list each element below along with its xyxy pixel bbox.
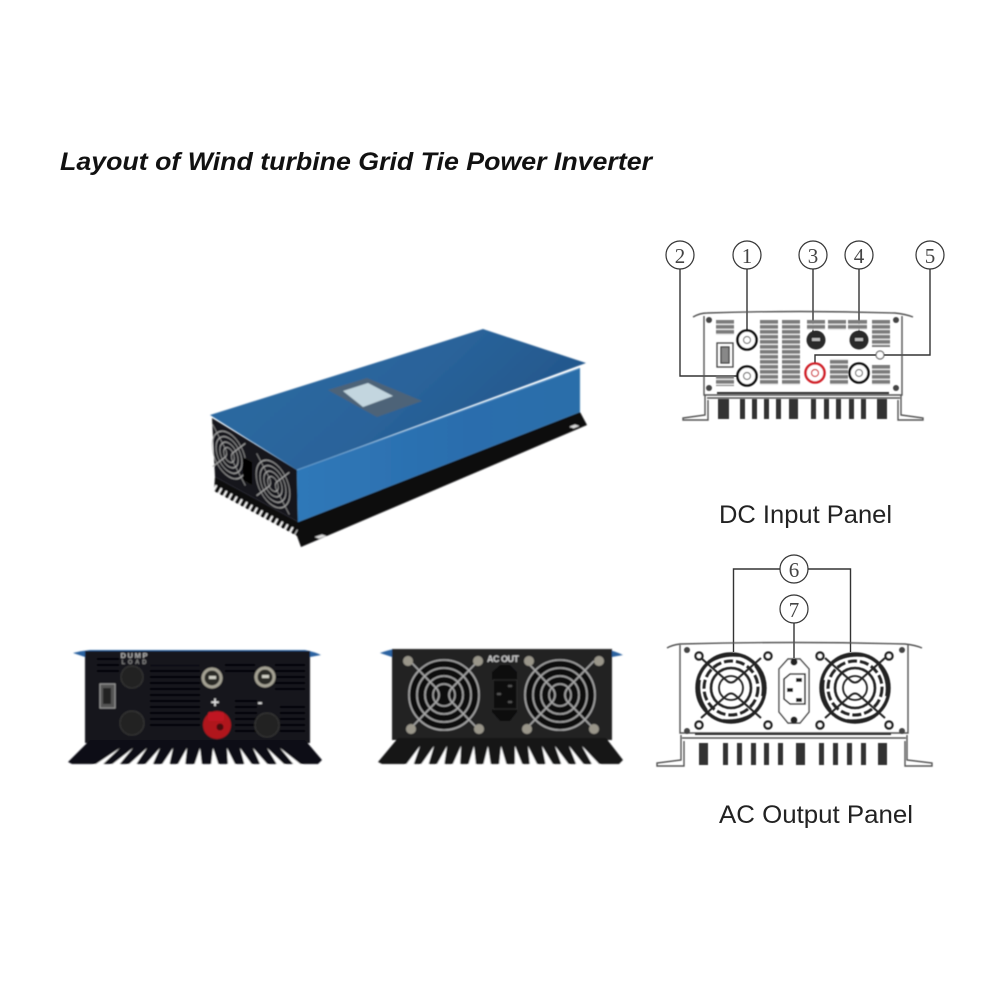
plus and minus marks: - bbox=[258, 694, 262, 711]
callout: number 1 bbox=[733, 241, 761, 331]
heat sink with flanges bbox=[378, 738, 623, 764]
blue cover edge bbox=[380, 649, 623, 657]
diagram: DC input panel bbox=[683, 312, 923, 420]
callout: number 5 bbox=[815, 241, 944, 364]
label: AC Output Panel: AC Output Panel bbox=[719, 801, 913, 829]
label: DC Input Panel: DC Input Panel bbox=[719, 501, 892, 529]
aviation plugs bbox=[806, 330, 868, 350]
callout: number 6 bbox=[734, 555, 850, 652]
vent slots bbox=[716, 320, 890, 386]
connector rings bbox=[738, 330, 868, 386]
photo: DC side of inverter bbox=[68, 650, 322, 766]
base bar bbox=[695, 733, 891, 735]
heat sink with flanges bbox=[68, 740, 322, 764]
heat sink fins bbox=[699, 743, 887, 765]
callout: number 3 bbox=[799, 241, 827, 332]
fan grill left bbox=[409, 660, 479, 730]
fan grill right bbox=[525, 660, 595, 730]
left fan face bbox=[212, 418, 298, 522]
heat sink fins bbox=[214, 488, 296, 533]
callout: number 6: 6 bbox=[789, 558, 799, 582]
corner screws bbox=[706, 317, 899, 391]
side blue cover bbox=[297, 368, 580, 522]
blue cover edge bbox=[73, 650, 321, 657]
mounting flange and heat sink bbox=[214, 412, 587, 547]
red positive terminal bbox=[203, 711, 231, 739]
serial port bbox=[717, 343, 733, 367]
plug pins bbox=[209, 675, 269, 679]
callout: number 5: 5 bbox=[925, 244, 935, 268]
photo: AC side of inverter bbox=[378, 649, 623, 766]
red positive connector bbox=[806, 364, 824, 382]
fan grill left bbox=[212, 424, 246, 486]
cover edge highlight bbox=[297, 368, 580, 470]
fan holes bbox=[408, 659, 480, 731]
callout: number 2 bbox=[666, 241, 737, 376]
aviation plugs bbox=[203, 668, 274, 687]
black body bbox=[392, 649, 612, 740]
corner screws bbox=[684, 647, 905, 734]
plus and minus marks: + bbox=[211, 694, 220, 711]
fan screws bbox=[696, 652, 892, 728]
fan left bbox=[697, 654, 765, 722]
title: Layout of Wind turbine Grid Tie Power Inverter bbox=[60, 148, 653, 176]
callout: number 7: 7 bbox=[789, 598, 799, 622]
display bezel bbox=[328, 378, 422, 417]
LCD screen bbox=[343, 383, 393, 407]
text: DUMP LOAD bbox=[120, 651, 148, 666]
vents bbox=[97, 658, 305, 736]
text: AC OUT: AC OUT bbox=[487, 654, 520, 664]
black body bbox=[85, 651, 310, 743]
fan grill right bbox=[256, 453, 290, 515]
screws bbox=[403, 656, 604, 734]
mounting holes bbox=[316, 425, 578, 538]
small indicator bbox=[876, 351, 884, 359]
gaps between heat sink fins bbox=[405, 746, 601, 766]
top blue cover bbox=[210, 329, 586, 470]
base bar bbox=[717, 392, 889, 394]
callout: number 4: 4 bbox=[854, 244, 865, 268]
gaps between heat sink fins bbox=[93, 748, 303, 766]
callout: number 3: 3 bbox=[808, 244, 818, 268]
plus and minus marks bbox=[211, 694, 262, 711]
callout: number 2: 2 bbox=[675, 244, 685, 268]
round connectors bbox=[120, 666, 279, 737]
panel outline bbox=[683, 312, 923, 420]
AC socket bbox=[492, 665, 517, 721]
text: DUMP LOAD: LOAD bbox=[122, 660, 147, 666]
text: DUMP LOAD: DUMP bbox=[120, 651, 148, 660]
serial port bbox=[100, 684, 115, 708]
diagram: AC output panel bbox=[657, 642, 932, 766]
fan right bbox=[821, 654, 889, 722]
panel outline bbox=[657, 642, 932, 766]
callout: number 1: 1 bbox=[742, 244, 752, 268]
callout: number 7 bbox=[780, 595, 808, 658]
socket pins bbox=[497, 685, 512, 703]
AC socket bbox=[243, 457, 252, 485]
AC socket bbox=[779, 659, 809, 723]
callout: number 4 bbox=[845, 241, 873, 332]
photo: inverter 3D product view bbox=[210, 329, 587, 547]
heat sink fins bbox=[718, 399, 887, 419]
